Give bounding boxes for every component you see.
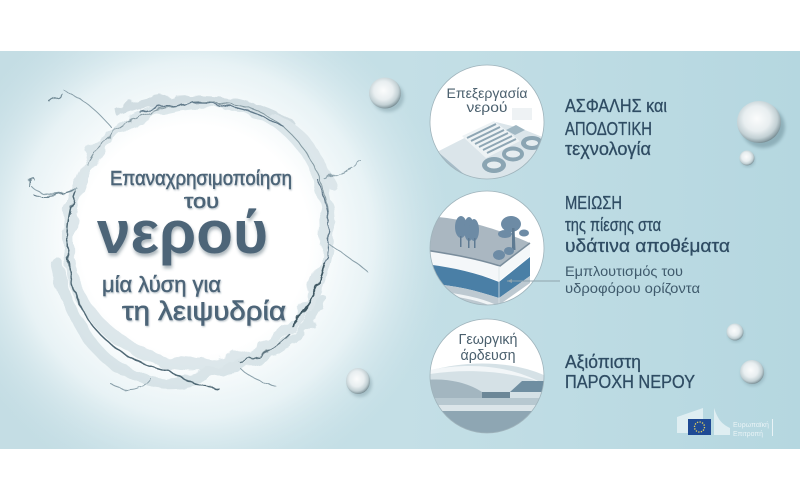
circle label: agricultural irrigation [458, 332, 518, 364]
water splash ring [28, 92, 366, 390]
circle label: agricultural irrigation: άρδευση [460, 348, 516, 364]
EU flag [688, 419, 711, 435]
text: reliable water supply: ΠΑΡΟΧΗ ΝΕΡΟΥ [565, 372, 695, 392]
EU Commission logo [677, 408, 773, 438]
water droplets [346, 78, 785, 397]
circle: agricultural irrigation [430, 318, 544, 434]
circle label: agricultural irrigation: Γεωργική [458, 332, 518, 348]
text: reduced pressure on water bodies: υδάτινα αποθέματα [565, 236, 730, 256]
icon: trees [455, 216, 529, 260]
text: safe and efficient technology: ΑΣΦΑΛΗΣ και [565, 96, 667, 116]
EU Commission logo: Επιτροπή [733, 429, 763, 438]
circle label: water treatment: νερού [466, 99, 508, 115]
text: safe and efficient technology [565, 96, 667, 159]
title text [97, 168, 292, 326]
text: reliable water supply [565, 352, 695, 392]
circle: aquifer cross-section [425, 191, 544, 306]
text: reduced pressure on water bodies: ΜΕΙΩΣΗ [565, 193, 622, 213]
infographic canvas [0, 51, 800, 449]
text: reduced pressure on water bodies: της πίεσης στα [565, 215, 661, 235]
text: reduced pressure on water bodies [565, 193, 730, 256]
EU Commission logo: Ευρωπαϊκή [733, 420, 769, 429]
title text: του [184, 191, 219, 213]
text: aquifer recharge: Εμπλουτισμός του [565, 264, 683, 279]
text: aquifer recharge [565, 264, 700, 296]
text: safe and efficient technology: ΑΠΟΔΟΤΙΚΗ [565, 119, 652, 139]
text: reliable water supply: Αξιόπιστη [565, 352, 641, 372]
background panel [0, 51, 800, 449]
circle label: water treatment [446, 85, 528, 115]
text: safe and efficient technology: τεχνολογία [565, 139, 651, 159]
title text: Επαναχρησιμοποίηση [110, 168, 292, 190]
text: aquifer recharge: υδροφόρου ορίζοντα [565, 281, 700, 296]
circle: water treatment [430, 64, 544, 180]
title text: νερού [97, 199, 268, 266]
circle label: water treatment: Επεξεργασία [446, 85, 528, 101]
title text: τη λειψυδρία [122, 296, 286, 326]
title text: μία λύση για [102, 272, 221, 297]
callout arrow line [507, 279, 560, 283]
